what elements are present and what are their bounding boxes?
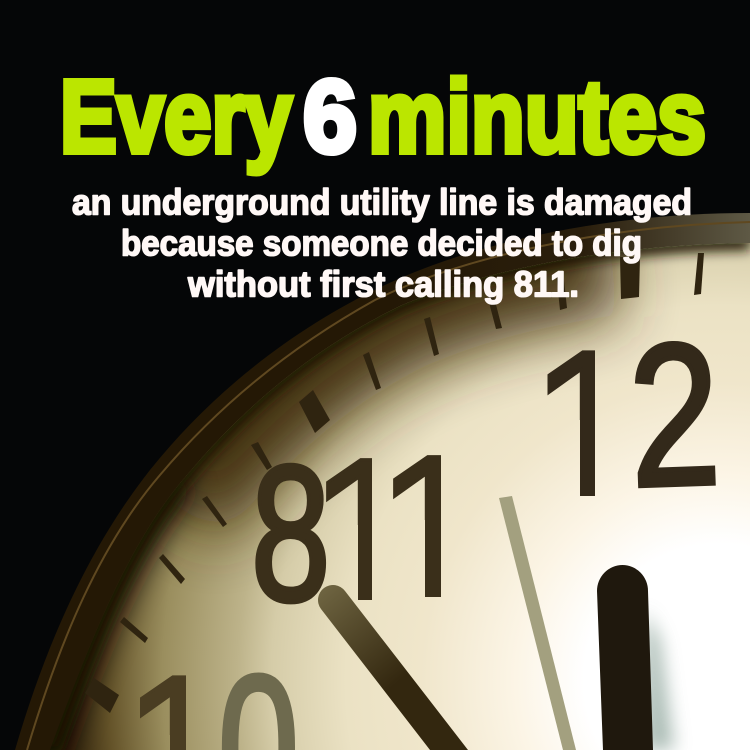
numeral 811: 8 <box>251 425 330 641</box>
clock <box>15 213 750 750</box>
title <box>60 59 706 174</box>
subtitle: an underground utility line is damaged <box>72 182 692 222</box>
clock face <box>50 243 750 750</box>
minute hand shadow <box>644 610 674 750</box>
face edge shading <box>40 243 750 750</box>
numeral 811 <box>255 455 441 604</box>
subtitle: because someone decided to dig <box>121 222 642 264</box>
hour tick marks <box>85 253 704 713</box>
numeral 811: 1 <box>308 416 421 644</box>
numeral 811: 1 <box>375 413 488 641</box>
hour hand <box>318 585 468 750</box>
subtitle: without first calling 811. <box>187 264 579 304</box>
title: Every <box>60 59 292 174</box>
numeral 12: 1 <box>529 308 645 540</box>
subtitle <box>72 182 692 304</box>
numeral 12: 2 <box>626 300 723 529</box>
title: 6 <box>303 59 357 174</box>
clock rim <box>15 213 750 750</box>
minute hand <box>597 565 653 750</box>
numeral 12 <box>548 341 716 496</box>
second hand <box>499 496 576 750</box>
numeral 10 <box>140 672 295 750</box>
